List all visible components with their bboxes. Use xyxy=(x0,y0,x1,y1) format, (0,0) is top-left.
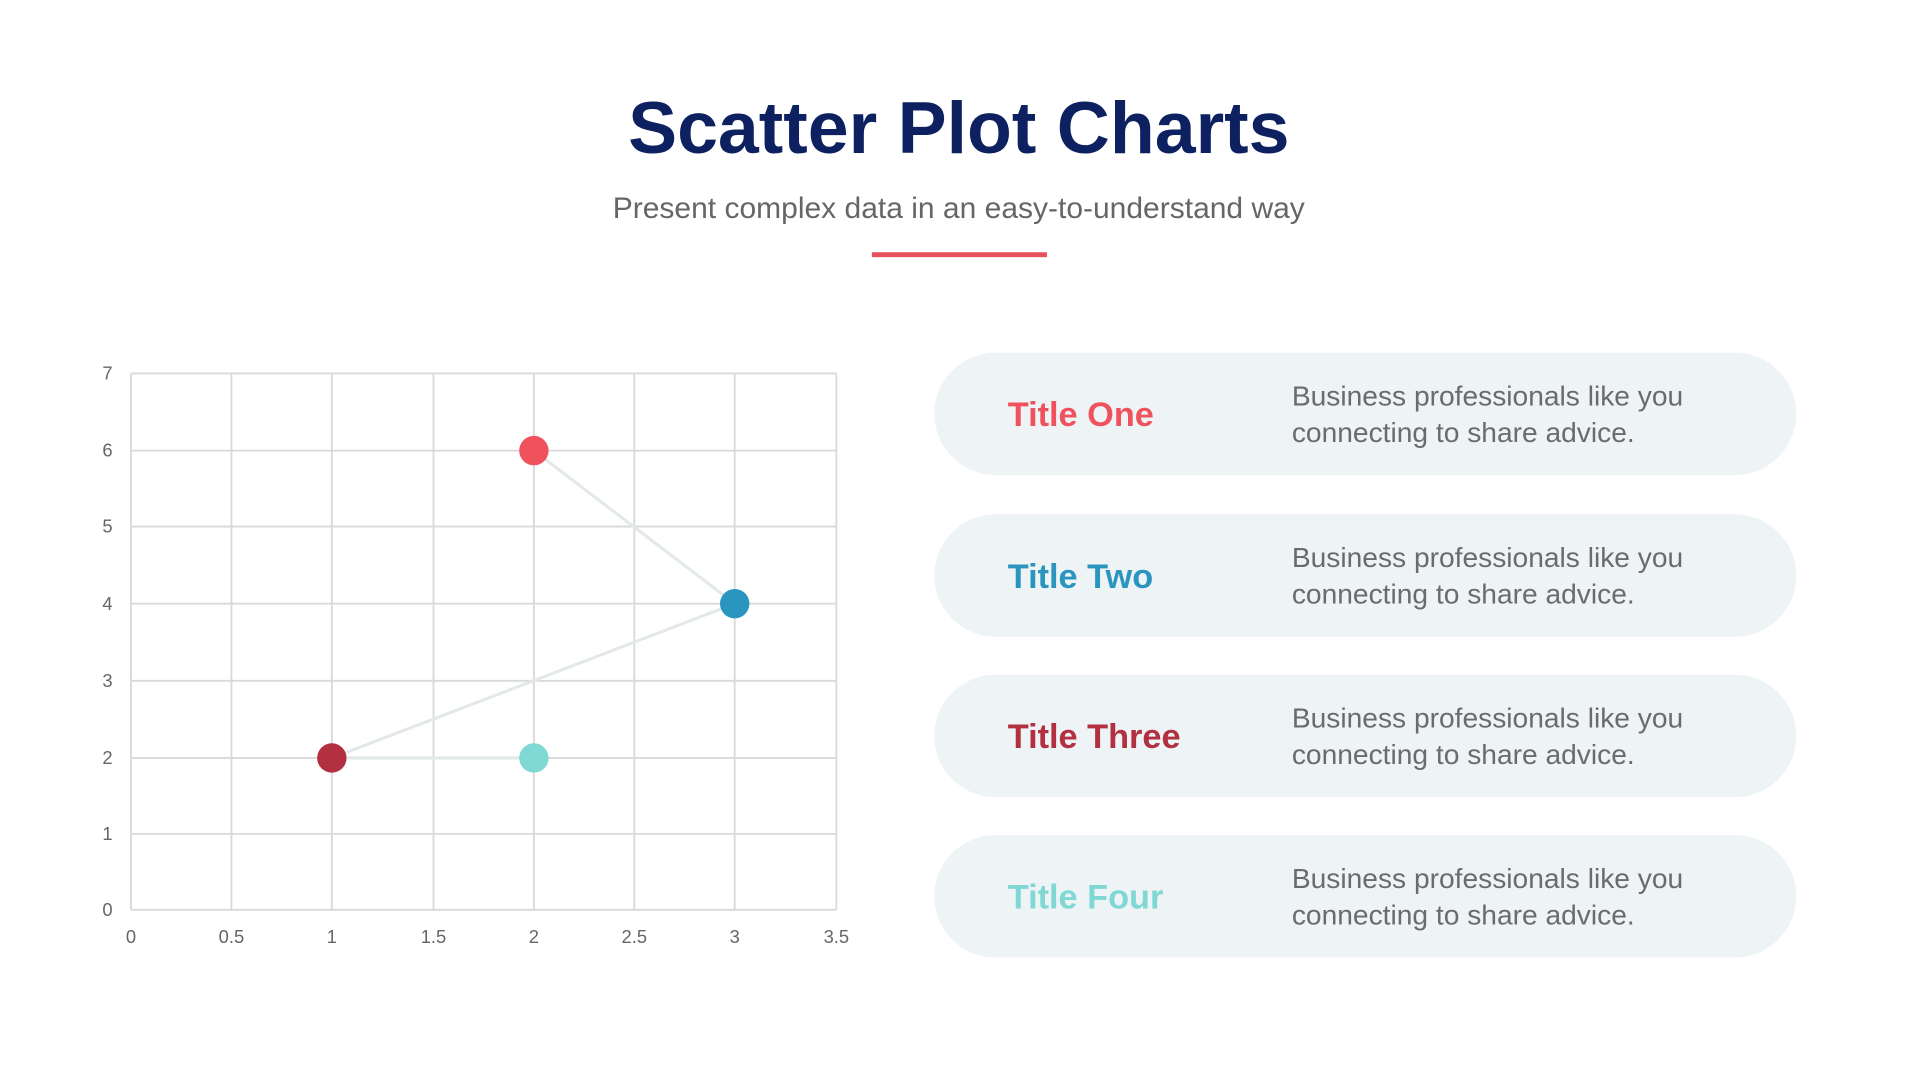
scatter chart: 2.5 xyxy=(622,926,647,947)
card: title one xyxy=(934,353,1796,475)
scatter chart: 2 xyxy=(529,926,539,947)
scatter chart: 7 xyxy=(102,363,113,384)
scatter chart: 3 xyxy=(730,926,740,947)
title: Scatter Plot Charts xyxy=(628,87,1289,169)
scatter chart: 0.5 xyxy=(219,926,244,947)
card: title two: Business professionals like you xyxy=(1292,541,1683,573)
card: title one: Business professionals like you xyxy=(1292,380,1683,411)
scatter chart: 1 xyxy=(327,926,337,947)
scatter chart: 4 xyxy=(102,593,113,614)
card: title one: connecting to share advice. xyxy=(1292,416,1635,448)
scatter chart: 0 xyxy=(126,926,136,947)
scatter chart: 1 xyxy=(102,823,113,844)
card: title three: Business professionals like you xyxy=(1292,702,1683,733)
scatter chart: 6 xyxy=(102,440,113,461)
scatter chart: 3 xyxy=(102,670,113,691)
card: title three: connecting to share advice. xyxy=(1292,738,1635,770)
scatter chart: 5 xyxy=(102,516,113,537)
card: title four: Title Four xyxy=(1008,878,1163,916)
accent line xyxy=(872,252,1047,257)
card: title four: connecting to share advice. xyxy=(1292,899,1635,931)
scatter chart: 2 xyxy=(102,747,113,768)
card: title two: Title Two xyxy=(1008,557,1153,595)
card: title four xyxy=(934,835,1796,958)
scatter chart: 1.5 xyxy=(421,926,446,947)
card: title two: connecting to share advice. xyxy=(1292,578,1635,610)
scatter chart: 0 xyxy=(102,899,113,920)
scatter chart: 3.5 xyxy=(824,926,849,947)
card: title one: Title One xyxy=(1008,396,1154,433)
subtitle: Present complex data in an easy-to-understand way xyxy=(613,192,1305,225)
card: title three xyxy=(934,675,1796,797)
card: title three: Title Three xyxy=(1008,718,1181,756)
scatter chart xyxy=(102,363,849,947)
card: title two xyxy=(934,514,1796,637)
card: title four: Business professionals like you xyxy=(1292,862,1683,894)
